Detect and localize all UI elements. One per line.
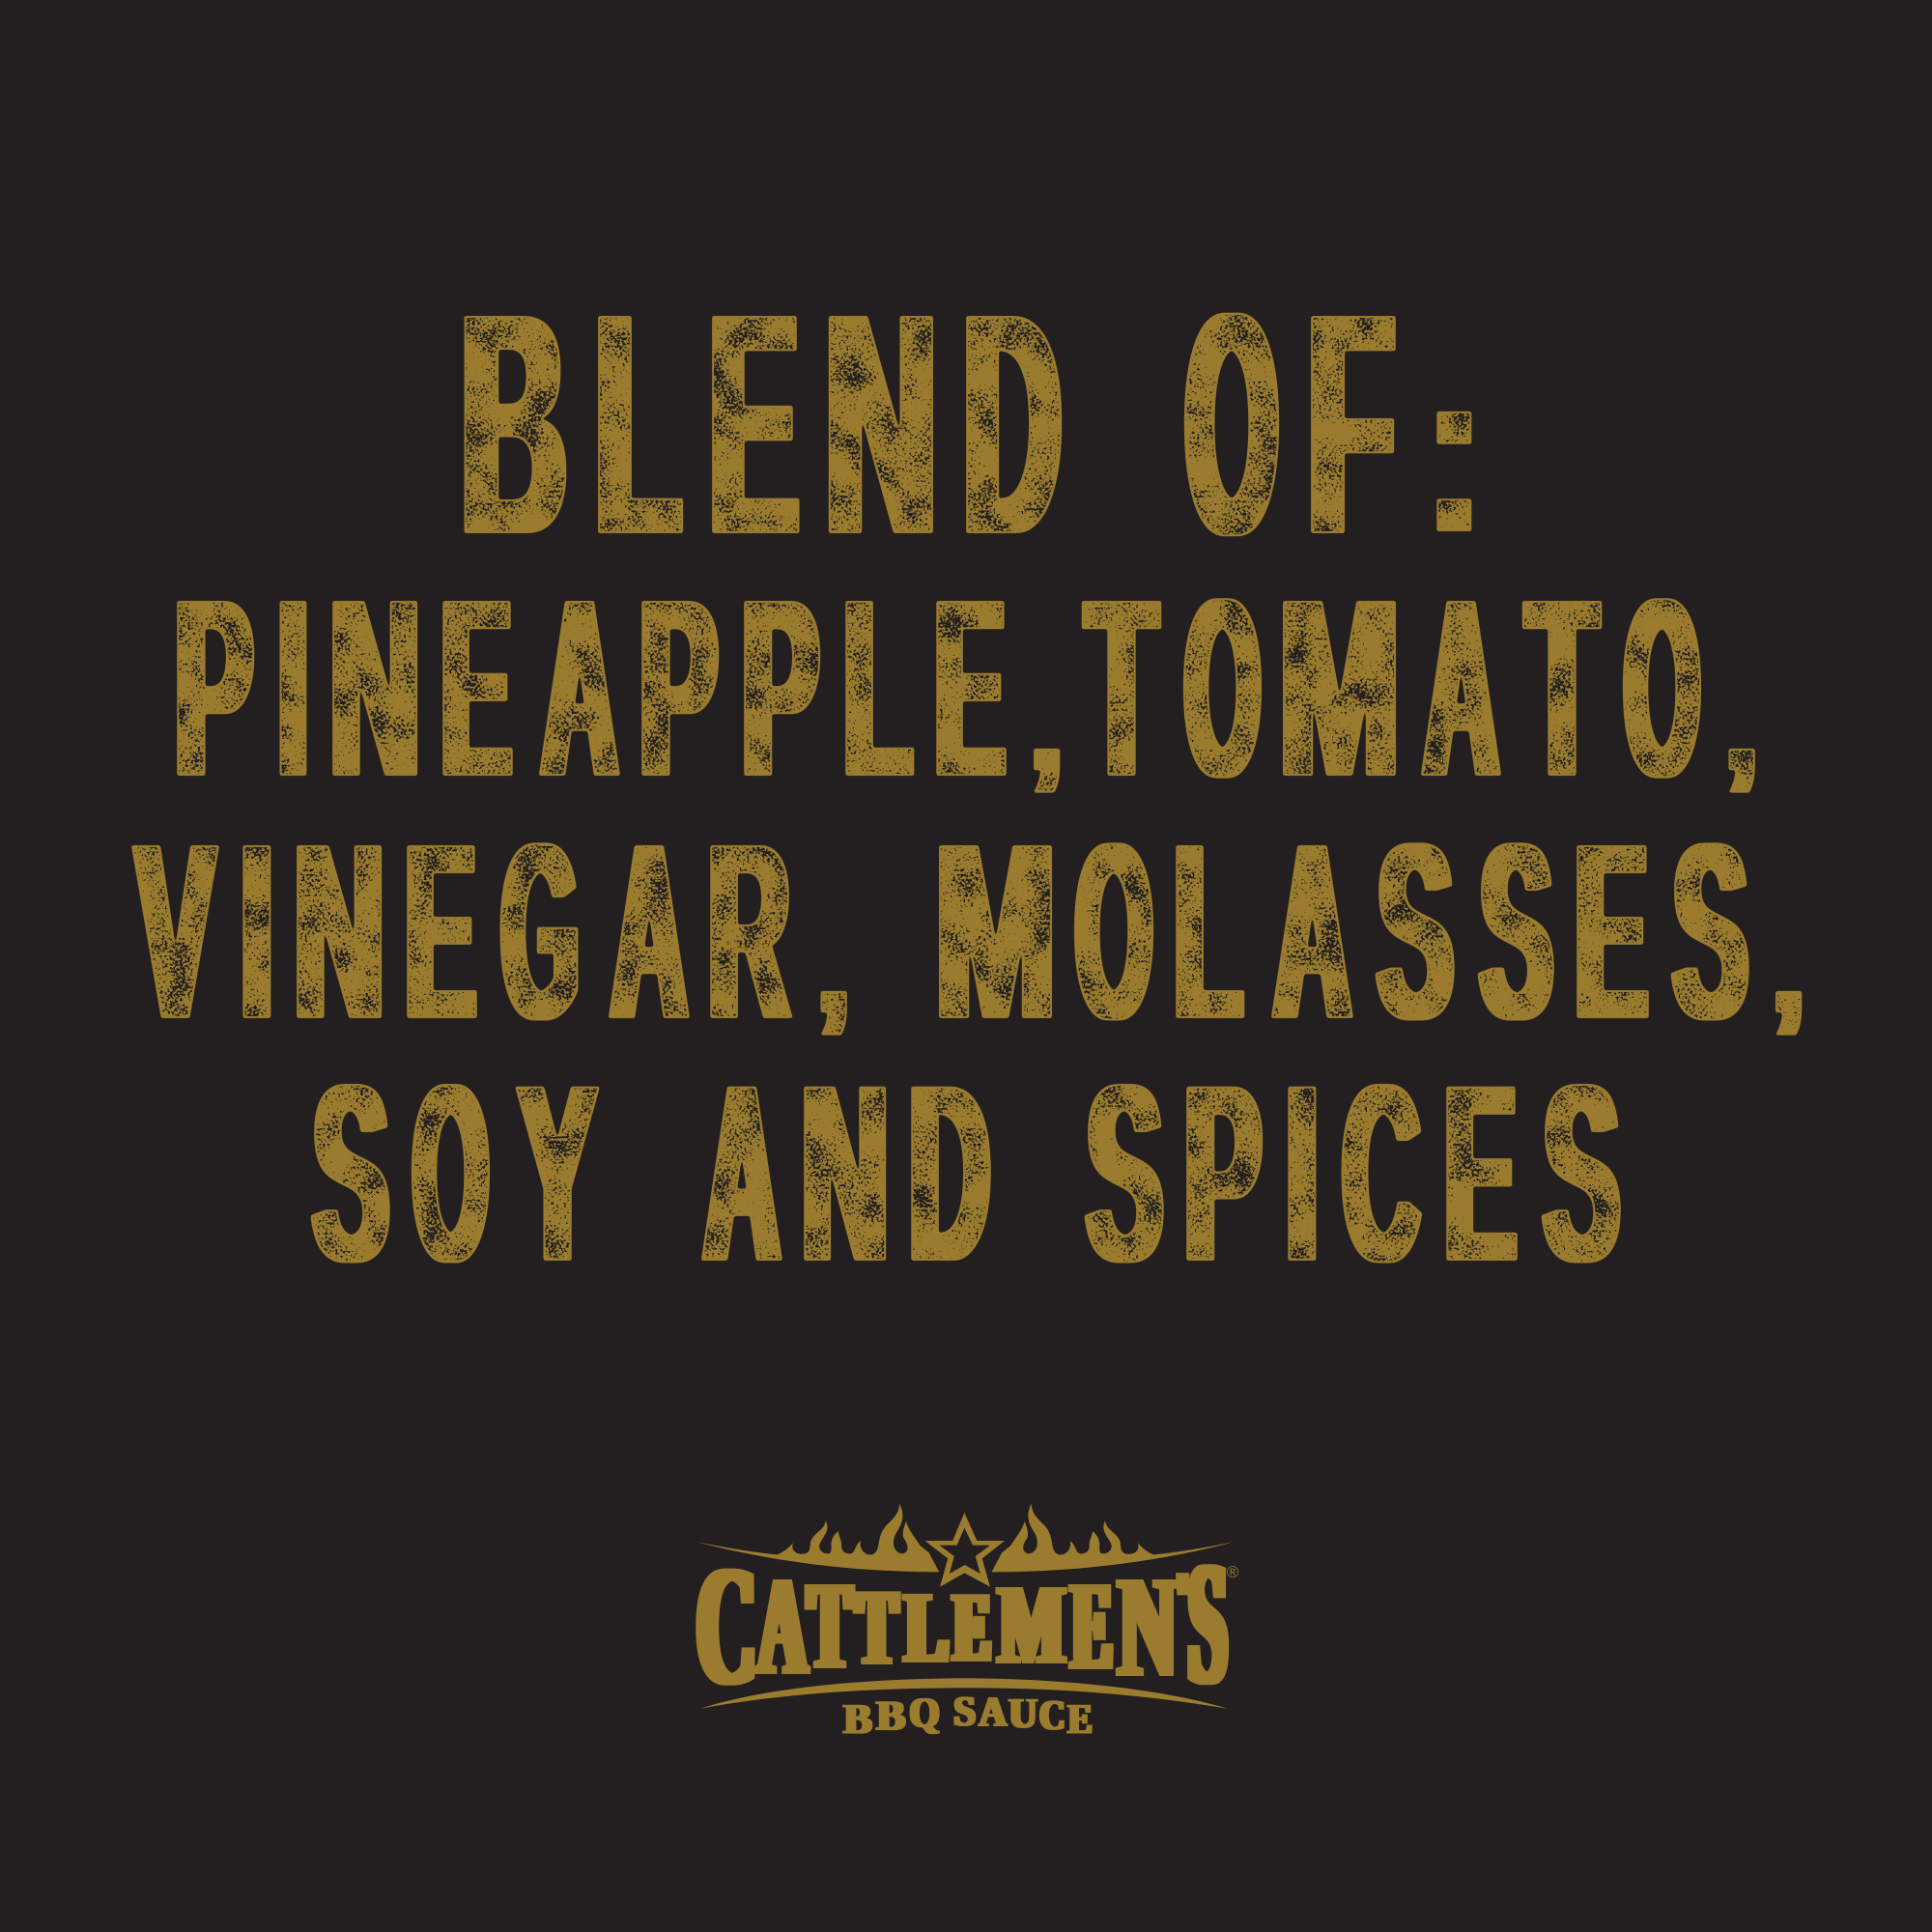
line 3: VINEGAR, MOLASSES,: L	[1175, 791, 1242, 1071]
logo tagline: BBQ SAUCE: S	[953, 1688, 976, 1735]
line 2: PINEAPPLE,TOMATO,: A	[542, 546, 617, 830]
logo tagline: BBQ SAUCE: A	[980, 1688, 1007, 1735]
logo wordmark: CATTLEMEN'S: C	[696, 1531, 756, 1719]
line 2: PINEAPPLE,TOMATO,: E	[441, 546, 511, 830]
line 2: PINEAPPLE,TOMATO,	[175, 546, 1756, 830]
line 1: BLEND OF:	[462, 247, 1479, 600]
line 3: VINEGAR, MOLASSES,: N	[294, 791, 384, 1071]
line 3: VINEGAR, MOLASSES,: ,	[1774, 881, 1804, 1043]
icon: flames, star and swooshes	[696, 1504, 1235, 1709]
line 3: VINEGAR, MOLASSES,: E	[406, 791, 475, 1071]
line 4: SOY AND SPICES: I	[1287, 1032, 1318, 1315]
line 3: VINEGAR, MOLASSES,: A	[1274, 791, 1350, 1071]
line 3: VINEGAR, MOLASSES,: ,	[819, 881, 848, 1043]
icon: star outline	[925, 1513, 1005, 1587]
logo wordmark: CATTLEMEN'S: T	[857, 1567, 896, 1687]
line 4: SOY AND SPICES: C	[1343, 1032, 1419, 1315]
line 4: SOY AND SPICES	[313, 1032, 1619, 1315]
logo tagline: BBQ SAUCE: E	[1067, 1695, 1093, 1743]
line 4: SOY AND SPICES: S	[313, 1032, 388, 1315]
logo: Cattlemen's BBQ Sauce	[696, 1504, 1239, 1743]
line 3: VINEGAR, MOLASSES,: M	[935, 791, 1056, 1071]
logo wordmark: CATTLEMEN'S: E	[1072, 1556, 1112, 1695]
logo wordmark: CATTLEMEN'S: '	[1179, 1554, 1187, 1647]
line 2: PINEAPPLE,TOMATO,: I	[278, 546, 308, 830]
line 2: PINEAPPLE,TOMATO,: O	[1185, 546, 1260, 830]
line 4: SOY AND SPICES: P	[1184, 1032, 1261, 1315]
line 2: PINEAPPLE,TOMATO,: L	[844, 546, 912, 830]
icon: right flame swoosh	[992, 1504, 1235, 1572]
headline: distressed ingredient text	[136, 247, 1804, 1315]
line 1: BLEND OF:: O	[1186, 247, 1277, 600]
logo wordmark: CATTLEMEN'S: T	[808, 1556, 852, 1693]
line 4: SOY AND SPICES: A	[704, 1032, 780, 1315]
line 4: SOY AND SPICES: S	[1544, 1032, 1619, 1315]
logo tagline: BBQ SAUCE: B	[876, 1691, 906, 1739]
logo tagline: BBQ SAUCE	[843, 1688, 1093, 1743]
line 3: VINEGAR, MOLASSES,: S	[1480, 791, 1552, 1071]
line 1: BLEND OF:: F	[1308, 247, 1394, 600]
logo wordmark: CATTLEMEN'S: M	[999, 1562, 1065, 1687]
line 3: VINEGAR, MOLASSES,: G	[501, 791, 579, 1071]
registered mark: ®	[1227, 1563, 1239, 1581]
logo wordmark: CATTLEMEN'S: L	[905, 1572, 948, 1683]
line 3: VINEGAR, MOLASSES,: S	[1378, 791, 1453, 1071]
line 2: PINEAPPLE,TOMATO,: P	[639, 546, 717, 830]
line 2: PINEAPPLE,TOMATO,: O	[1625, 546, 1699, 830]
line 3: VINEGAR, MOLASSES,: E	[1576, 791, 1647, 1071]
logo tagline: BBQ SAUCE: B	[843, 1695, 872, 1743]
line 3: VINEGAR, MOLASSES,: S	[1673, 791, 1747, 1071]
icon: left flame swoosh	[696, 1504, 939, 1572]
line 4: SOY AND SPICES: D	[910, 1032, 990, 1315]
line 2: PINEAPPLE,TOMATO,: A	[1424, 546, 1498, 830]
line 1: BLEND OF:: :	[1429, 317, 1479, 582]
icon: lower swoosh	[699, 1678, 1229, 1709]
logo wordmark: CATTLEMEN'S: S	[1188, 1525, 1227, 1719]
line 1: BLEND OF:: N	[825, 247, 937, 600]
line 2: PINEAPPLE,TOMATO,: P	[175, 546, 252, 830]
line 2: PINEAPPLE,TOMATO,: E	[935, 546, 1005, 830]
line 3: VINEGAR, MOLASSES,: O	[1076, 791, 1151, 1071]
line 1: BLEND OF:: L	[595, 247, 681, 600]
line 2: PINEAPPLE,TOMATO,: ,	[1727, 639, 1756, 801]
line 2: PINEAPPLE,TOMATO,: P	[742, 546, 818, 830]
logo tagline: BBQ SAUCE: C	[1039, 1691, 1065, 1739]
line 3: VINEGAR, MOLASSES,: V	[136, 791, 215, 1071]
line 4: SOY AND SPICES: S	[1087, 1032, 1162, 1315]
line 2: PINEAPPLE,TOMATO,: M	[1279, 546, 1400, 830]
line 3: VINEGAR, MOLASSES,: I	[242, 791, 272, 1071]
logo wordmark: CATTLEMEN'S: E	[954, 1572, 990, 1682]
line 2: PINEAPPLE,TOMATO,: N	[330, 546, 420, 830]
logo wordmark: CATTLEMEN'S: A	[758, 1548, 807, 1703]
line 3: VINEGAR, MOLASSES,: R	[709, 791, 789, 1071]
line 1: BLEND OF:: D	[964, 247, 1061, 600]
line 4: SOY AND SPICES: N	[802, 1032, 889, 1315]
logo wordmark: CATTLEMEN'S	[696, 1525, 1227, 1719]
logo tagline: BBQ SAUCE: Q	[910, 1689, 939, 1736]
line 1: BLEND OF:: B	[462, 247, 566, 600]
line 2: PINEAPPLE,TOMATO,: T	[1526, 546, 1598, 830]
line 3: VINEGAR, MOLASSES,	[136, 791, 1804, 1071]
line 3: VINEGAR, MOLASSES,: A	[611, 791, 687, 1071]
logo wordmark: CATTLEMEN'S: N	[1119, 1548, 1177, 1706]
logo tagline: BBQ SAUCE: U	[1009, 1690, 1037, 1737]
line 4: SOY AND SPICES: E	[1445, 1032, 1516, 1315]
line 2: PINEAPPLE,TOMATO,: ,	[1032, 639, 1062, 801]
line 1: BLEND OF:: E	[710, 247, 798, 600]
line 4: SOY AND SPICES: O	[413, 1032, 488, 1315]
line 2: PINEAPPLE,TOMATO,: T	[1086, 546, 1157, 830]
line 4: SOY AND SPICES: Y	[519, 1032, 596, 1315]
